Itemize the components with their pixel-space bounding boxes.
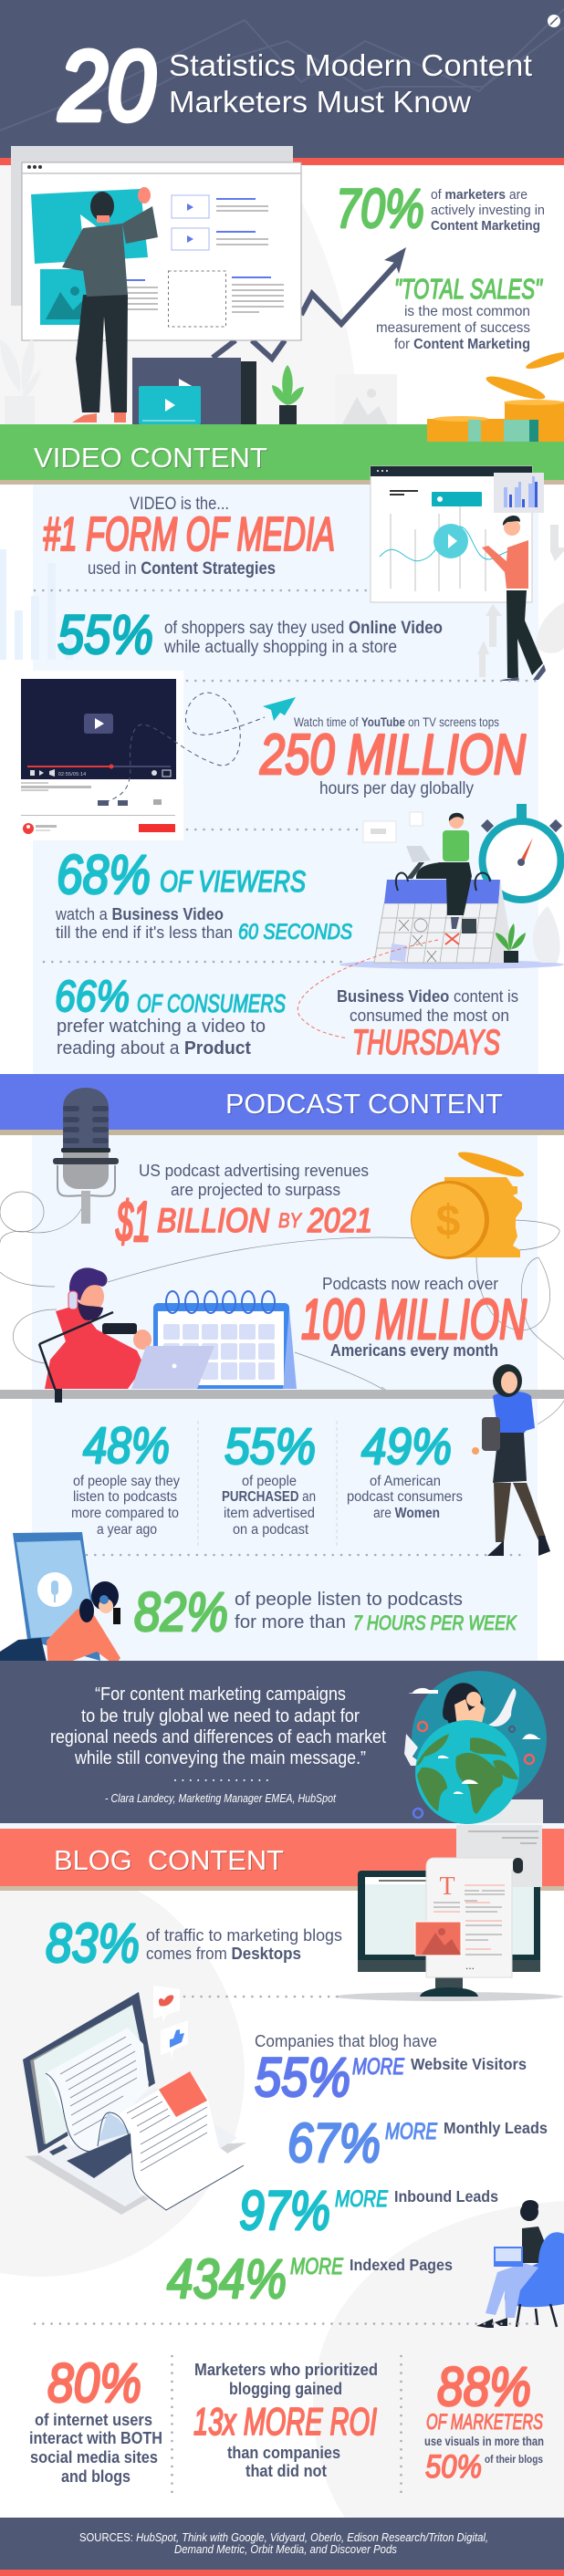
text: companies that blog: Companies that blog have	[255, 2032, 437, 2050]
section heading: podcast content	[0, 1074, 564, 1135]
stat: 48%: 48%	[83, 1416, 170, 1474]
stat: 97% more inbound leads: MORE	[335, 2186, 388, 2212]
stat: 80% of internet users: 80%	[47, 2352, 141, 2414]
stat: 97% more inbound leads	[239, 2180, 498, 2241]
text: 250 million hours: hours per day globally	[319, 779, 474, 798]
stat: 80% of internet users	[29, 2352, 162, 2486]
text: 82% of people	[134, 1581, 517, 1643]
stat: 13x more ROI: 13x MORE ROI	[193, 2400, 377, 2443]
stat: 13x more ROI: blogging gained	[229, 2380, 342, 2398]
stat: 434% more indexed pages	[167, 2248, 453, 2310]
text: 66% of consumers: reading about a Product	[57, 1038, 251, 1059]
stat: 88% of marketers: 88%	[437, 2356, 531, 2417]
text: thursdays: THURSDAYS	[352, 1024, 500, 1062]
stat: 434% more indexed pages: MORE	[290, 2254, 343, 2279]
stat: 48%	[71, 1416, 180, 1538]
panel: footer sources	[0, 2518, 564, 2576]
text: 83% desktops: of traffic to marketing blogs	[146, 1925, 342, 1945]
text: total sales: for Content Marketing	[394, 337, 530, 352]
stat: 55% more website visitors: Website Visitors	[411, 2055, 527, 2073]
illustration: monitor with documents	[335, 1825, 563, 2001]
text: 70% of marketers: of marketers are	[431, 187, 527, 203]
illustration: phone with listening girl	[0, 1532, 120, 1673]
section heading: video content: VIDEO CONTENT	[34, 442, 267, 474]
text: 55% of shoppers: 55%	[57, 604, 153, 665]
illustration: monitor with documents: ...	[465, 1959, 475, 1972]
text: $1 billion by 2021	[115, 1162, 372, 1254]
title	[58, 30, 532, 141]
text: total sales: measurement of success	[376, 320, 530, 336]
section heading: podcast content: PODCAST CONTENT	[225, 1088, 503, 1120]
text: 55% of shoppers	[57, 604, 443, 665]
section heading: video content	[0, 424, 564, 485]
illustration: microphone	[53, 1088, 119, 1224]
text: 250 million hours: Watch time of YouTube on TV screens tops	[294, 714, 499, 729]
illustration: coin stacks	[427, 349, 564, 442]
text: $1 billion by 2021: BY	[278, 1209, 302, 1232]
text: 70% of marketers: actively investing in	[431, 203, 545, 218]
text: 83% desktops: 83%	[46, 1913, 140, 1974]
panel: footer sources: SOURCES: HubSpot, Think with Google, Vidyard, Oberlo, Edison Research/Triton Digital,	[79, 2531, 488, 2544]
stat: 49%: are Women	[373, 1506, 440, 1521]
text: #1 form of media: #1 FORM OF MEDIA	[43, 508, 335, 561]
decorative wire curves	[0, 1192, 564, 1431]
text: $1 billion by 2021: BILLION	[157, 1202, 269, 1239]
illustration: woman on phone	[472, 1364, 550, 1556]
panel: quote: regional needs and differences of each market	[50, 1727, 386, 1747]
illustration: calendar with stopwatch and woman	[339, 804, 564, 969]
stat: 67% more monthly leads: 67%	[287, 2112, 381, 2174]
panel: header	[0, 0, 564, 165]
text: 55% of shoppers: while actually shopping in a store	[163, 638, 397, 657]
stat: 55% more website visitors: 55%	[255, 2047, 350, 2108]
text: 250 million hours	[259, 714, 526, 798]
stat: 48%: of people say they	[73, 1474, 180, 1489]
text: total sales: is the most common	[404, 304, 530, 319]
dividers	[172, 2356, 402, 2493]
text: 82% of people: 7 HOURS PER WEEK	[353, 1611, 517, 1634]
text: 66% of consumers: prefer watching a video to	[57, 1017, 266, 1037]
text: 82% of people: for more than	[235, 1611, 346, 1632]
text: 66% of consumers: 66%	[55, 973, 130, 1021]
text: 70% of marketers: Content Marketing	[431, 218, 540, 234]
section heading: blog content	[0, 1829, 564, 1891]
illustration: person in chair	[476, 2200, 564, 2328]
stat: 88% of marketers: of their blogs	[485, 2455, 543, 2466]
text: 70% of marketers: 70%	[336, 178, 424, 239]
text: 66% of consumers	[55, 973, 286, 1059]
text: 82% of people: 82%	[134, 1581, 228, 1643]
text: $1 billion by 2021: 2021	[307, 1202, 372, 1239]
panel: intro background	[0, 165, 358, 424]
stat: 55%: 55%	[225, 1417, 316, 1475]
icon: growth arrow	[213, 247, 406, 359]
arrow: dashed paper plane trail	[105, 693, 296, 802]
stat: 55%: PURCHASED an	[222, 1489, 316, 1505]
panel: quote	[0, 1661, 564, 1829]
stat: 13x more ROI: Marketers who prioritized	[194, 2361, 378, 2379]
text: #1 form of media: used in Content Strategies	[88, 559, 276, 579]
text: 68% of viewers: watch a Business Video	[55, 905, 224, 923]
stat: 13x more ROI: than companies	[227, 2444, 340, 2462]
stat: 97% more inbound leads: 97%	[239, 2180, 330, 2241]
panel: podcast stats	[0, 1389, 564, 1661]
text: 70% of marketers	[336, 178, 545, 239]
panel: podcast background	[32, 1135, 538, 1390]
arrow: dashed curve to thursdays	[298, 940, 438, 1038]
title: Marketers Must Know	[169, 85, 471, 119]
text: $1 billion by 2021: $1	[115, 1191, 151, 1254]
illustration: monitor with documents: T	[439, 1872, 455, 1901]
stat: 49%	[347, 1417, 463, 1521]
panel: video background	[0, 485, 564, 1074]
stat: 80% of internet users: of internet users	[35, 2411, 152, 2429]
stat: 55%	[222, 1417, 316, 1538]
text: 83% desktops	[46, 1913, 342, 1974]
text: 68% of viewers	[55, 844, 352, 944]
illustration: desk items	[0, 338, 397, 424]
stat: 55%: of people	[242, 1474, 297, 1489]
text: $1 billion by 2021: US podcast advertising revenues	[139, 1162, 369, 1180]
panel: quote: while still conveying the main message.”	[74, 1748, 366, 1768]
stat: 97% more inbound leads: Inbound Leads	[394, 2187, 498, 2206]
text: $1 billion by 2021: are projected to surpass	[171, 1181, 340, 1199]
background circles	[0, 1891, 564, 2518]
text: 68% of viewers: OF VIEWERS	[160, 865, 306, 898]
stat: 49%: 49%	[361, 1417, 452, 1475]
stat: 49%: podcast consumers	[347, 1489, 463, 1505]
text: 68% of viewers: 60 SECONDS	[238, 920, 352, 944]
text: 100 million americans: Americans every month	[330, 1341, 498, 1360]
stat: 434% more indexed pages: 434%	[167, 2248, 287, 2310]
stat: 13x more ROI	[193, 2361, 378, 2480]
stat: 88% of marketers: use visuals in more than	[424, 2435, 544, 2448]
stat: 434% more indexed pages: Indexed Pages	[350, 2256, 453, 2274]
stat: 55%: item advertised	[224, 1506, 315, 1521]
stat: 55% more website visitors: MORE	[352, 2054, 404, 2080]
text: 100 million americans	[301, 1275, 527, 1360]
stat: 67% more monthly leads: Monthly Leads	[444, 2119, 548, 2137]
title: 20	[58, 30, 155, 141]
stat: 13x more ROI: that did not	[245, 2462, 327, 2480]
title: Statistics Modern Content	[169, 48, 532, 82]
panel: footer sources: Demand Metric, Orbit Media, and Discover Pods	[174, 2543, 397, 2556]
panel: quote: to be truly global we need to adapt for	[81, 1706, 360, 1726]
stat: 48%: listen to podcasts	[73, 1489, 177, 1505]
illustration: globe with woman	[404, 1671, 547, 1824]
text: 100 million americans: Podcasts now reach over	[322, 1275, 498, 1293]
text: 66% of consumers: OF CONSUMERS	[137, 989, 286, 1017]
stat: 48%: more compared to	[71, 1506, 179, 1521]
illustration: video player: 02:55/05:14	[58, 772, 86, 777]
text: 82% of people: of people listen to podcasts	[235, 1589, 463, 1610]
stat: 55% more website visitors	[255, 2047, 527, 2108]
illustration: browser window with person	[11, 146, 301, 422]
panel: quote: “For content marketing campaigns	[95, 1684, 346, 1705]
stat: 67% more monthly leads	[287, 2112, 548, 2174]
text: 68% of viewers: till the end if it's less than	[56, 923, 233, 942]
panel: quote: - Clara Landecy, Marketing Manager EMEA, HubSpot	[105, 1791, 337, 1805]
text: thursdays	[337, 987, 518, 1062]
text: 55% of shoppers: of shoppers say they used Online Video	[164, 619, 443, 638]
text: thursdays: Business Video content is	[337, 987, 518, 1006]
stat: 48%: a year ago	[97, 1522, 157, 1538]
stat: 80% of internet users: and blogs	[61, 2467, 131, 2486]
illustration: laptop with blog paper	[23, 1986, 246, 2215]
text: 83% desktops: comes from Desktops	[146, 1944, 301, 1963]
illustration: video player	[21, 679, 176, 834]
text: #1 form of media	[43, 495, 335, 579]
stat: 88% of marketers	[424, 2356, 544, 2485]
stat: 88% of marketers: 50%	[425, 2449, 482, 2485]
illustration: analytics window with man	[371, 466, 546, 681]
text: total sales	[376, 273, 543, 352]
stat: 55%: on a podcast	[233, 1522, 309, 1538]
illustration: gold coins: $	[436, 1197, 461, 1246]
stat: 67% more monthly leads: MORE	[385, 2119, 437, 2144]
text: thursdays: consumed the most on	[350, 1006, 509, 1025]
stat: 80% of internet users: social media sites	[30, 2448, 158, 2466]
stat: 49%: of American	[370, 1474, 441, 1489]
text: #1 form of media: VIDEO is the...	[130, 495, 229, 514]
illustration: gold coins	[411, 1148, 526, 1259]
illustration: podcaster and calendar	[39, 1267, 297, 1396]
section heading: blog content: BLOG CONTENT	[54, 1844, 284, 1876]
text: 68% of viewers: 68%	[57, 844, 151, 905]
stat: 80% of internet users: interact with BOTH	[29, 2429, 162, 2447]
